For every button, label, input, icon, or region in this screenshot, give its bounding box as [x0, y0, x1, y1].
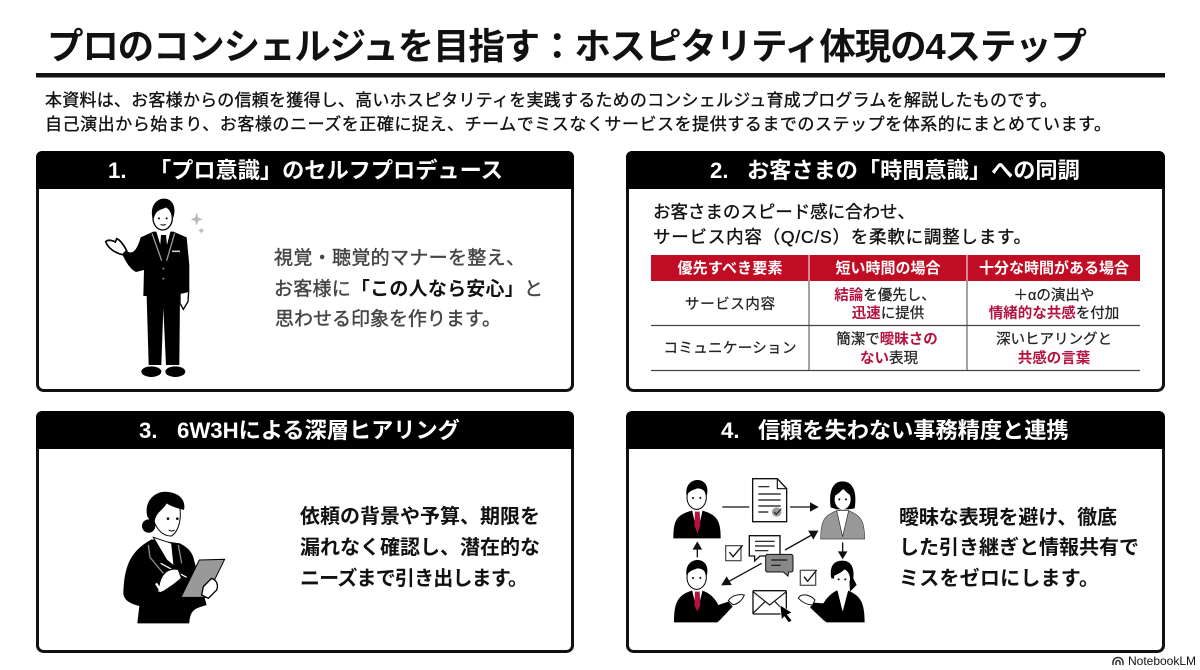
text block: step 1 [274, 247, 543, 330]
table: priorities by available time: 深いヒアリングと [996, 331, 1112, 348]
text block: step 4 [899, 506, 1139, 590]
arrow: man to document [722, 505, 749, 509]
table: priorities by available time: サービス内容 [685, 296, 776, 313]
icon: woman top-right [821, 481, 865, 539]
panel: step 3 deep hearing [36, 411, 574, 652]
text block: step 3: 依頼の背景や予算、期限を [300, 505, 540, 528]
heading: step 2: 2. [710, 158, 729, 183]
heading: step 2 [626, 151, 1165, 189]
icon: checkbox right [800, 570, 817, 585]
icon: checkbox left [726, 545, 743, 561]
footer: NotebookLM logo: NotebookLM [1128, 654, 1196, 668]
panel: step 2 time awareness [626, 151, 1165, 390]
heading: step 3 [36, 411, 574, 449]
table: priorities by available time: 簡潔で曖昧さの [836, 331, 938, 348]
panel: step 1 self-produce [36, 151, 574, 390]
intro text: 自己演出から始まり、お客様のニーズを正確に捉え、チームでミスなくサービスを提供するまでのステップを体系的にまとめています。 [45, 115, 1111, 134]
heading: step 2: お客さまの「時間意識」への同調 [747, 158, 1080, 183]
text block: step 4: ミスをゼロにします。 [899, 566, 1099, 590]
heading: step 1 [36, 151, 574, 189]
table: priorities by available time: 共感の言葉 [1018, 349, 1091, 367]
arrow: document to woman [790, 503, 817, 511]
heading: step 1: 「プロ意識」のセルフプロデュース [149, 157, 503, 183]
text block: step 4: した引き継ぎと情報共有で [899, 535, 1139, 559]
table: priorities by available time: 情緒的な共感を付加 [989, 304, 1119, 322]
icon: speech bubble white [749, 536, 780, 561]
table: priorities by available time [651, 255, 1140, 370]
heading: step 4 [626, 411, 1165, 449]
heading: step 3: 3. [139, 418, 158, 443]
heading: step 3: 6W3Hによる深層ヒアリング [177, 417, 460, 443]
text block: step 2 lead [653, 202, 1031, 247]
table: priorities by available time: 結論を優先し、 [834, 286, 936, 304]
table: priorities by available time: 十分な時間がある場合 [979, 259, 1129, 277]
text block: step 2 lead: サービス内容（Q/C/S）を柔軟に調整します。 [653, 227, 1031, 247]
intro text [45, 91, 1111, 134]
text block: step 4: 曖昧な表現を避け、徹底 [899, 506, 1117, 529]
heading: step 4: 4. [721, 418, 740, 443]
text block: step 1: お客様に「この人なら安心」と [274, 278, 543, 300]
arrow: up [694, 543, 701, 557]
arrow: down [839, 542, 846, 558]
table: priorities by available time: 短い時間の場合 [836, 259, 940, 277]
icon: woman with tablet [123, 492, 225, 623]
text block: step 3 [300, 505, 540, 590]
icon: man top-left [673, 480, 721, 538]
table: priorities by available time: 優先すべき要素 [678, 260, 782, 277]
title: プロのコンシェルジュを目指す：ホスピタリティ体現の4ステップ [47, 26, 1087, 67]
icon: document [753, 479, 787, 522]
text block: step 2 lead: お客さまのスピード感に合わせ、 [653, 202, 915, 222]
icon: woman bottom-right [798, 561, 865, 622]
text block: step 3: 漏れなく確認し、潜在的な [300, 536, 540, 559]
intro text: 本資料は、お客様からの信頼を獲得し、高いホスピタリティを実践するためのコンシェルジュ育成プログラムを解説したものです。 [45, 91, 1057, 110]
icon: concierge man in suit [106, 199, 205, 377]
table: priorities by available time: ない表現 [860, 350, 918, 367]
icon: man bottom-left [674, 560, 744, 622]
table: priorities by available time: 迅速に提供 [852, 305, 924, 322]
panel: step 4 accuracy and collaboration [626, 411, 1165, 652]
arrow: to man bottom-left [722, 563, 762, 585]
text block: step 1: 思わせる印象を作ります。 [275, 308, 501, 330]
table: priorities by available time: コミュニケーション [664, 340, 796, 357]
text block: step 1: 視覚・聴覚的マナーを整え、 [274, 247, 525, 269]
heading: step 4: 信頼を失わない事務精度と連携 [758, 418, 1069, 443]
icon: envelope and cursor [753, 591, 792, 623]
text block: step 3: ニーズまで引き出します。 [300, 566, 528, 590]
arrow: to woman top-right [785, 531, 817, 550]
heading: step 1: 1. [108, 158, 127, 183]
table: priorities by available time: ＋αの演出や [1014, 287, 1094, 304]
icon: speech bubble grey [766, 554, 793, 576]
icon: team information sharing diagram [673, 479, 865, 623]
